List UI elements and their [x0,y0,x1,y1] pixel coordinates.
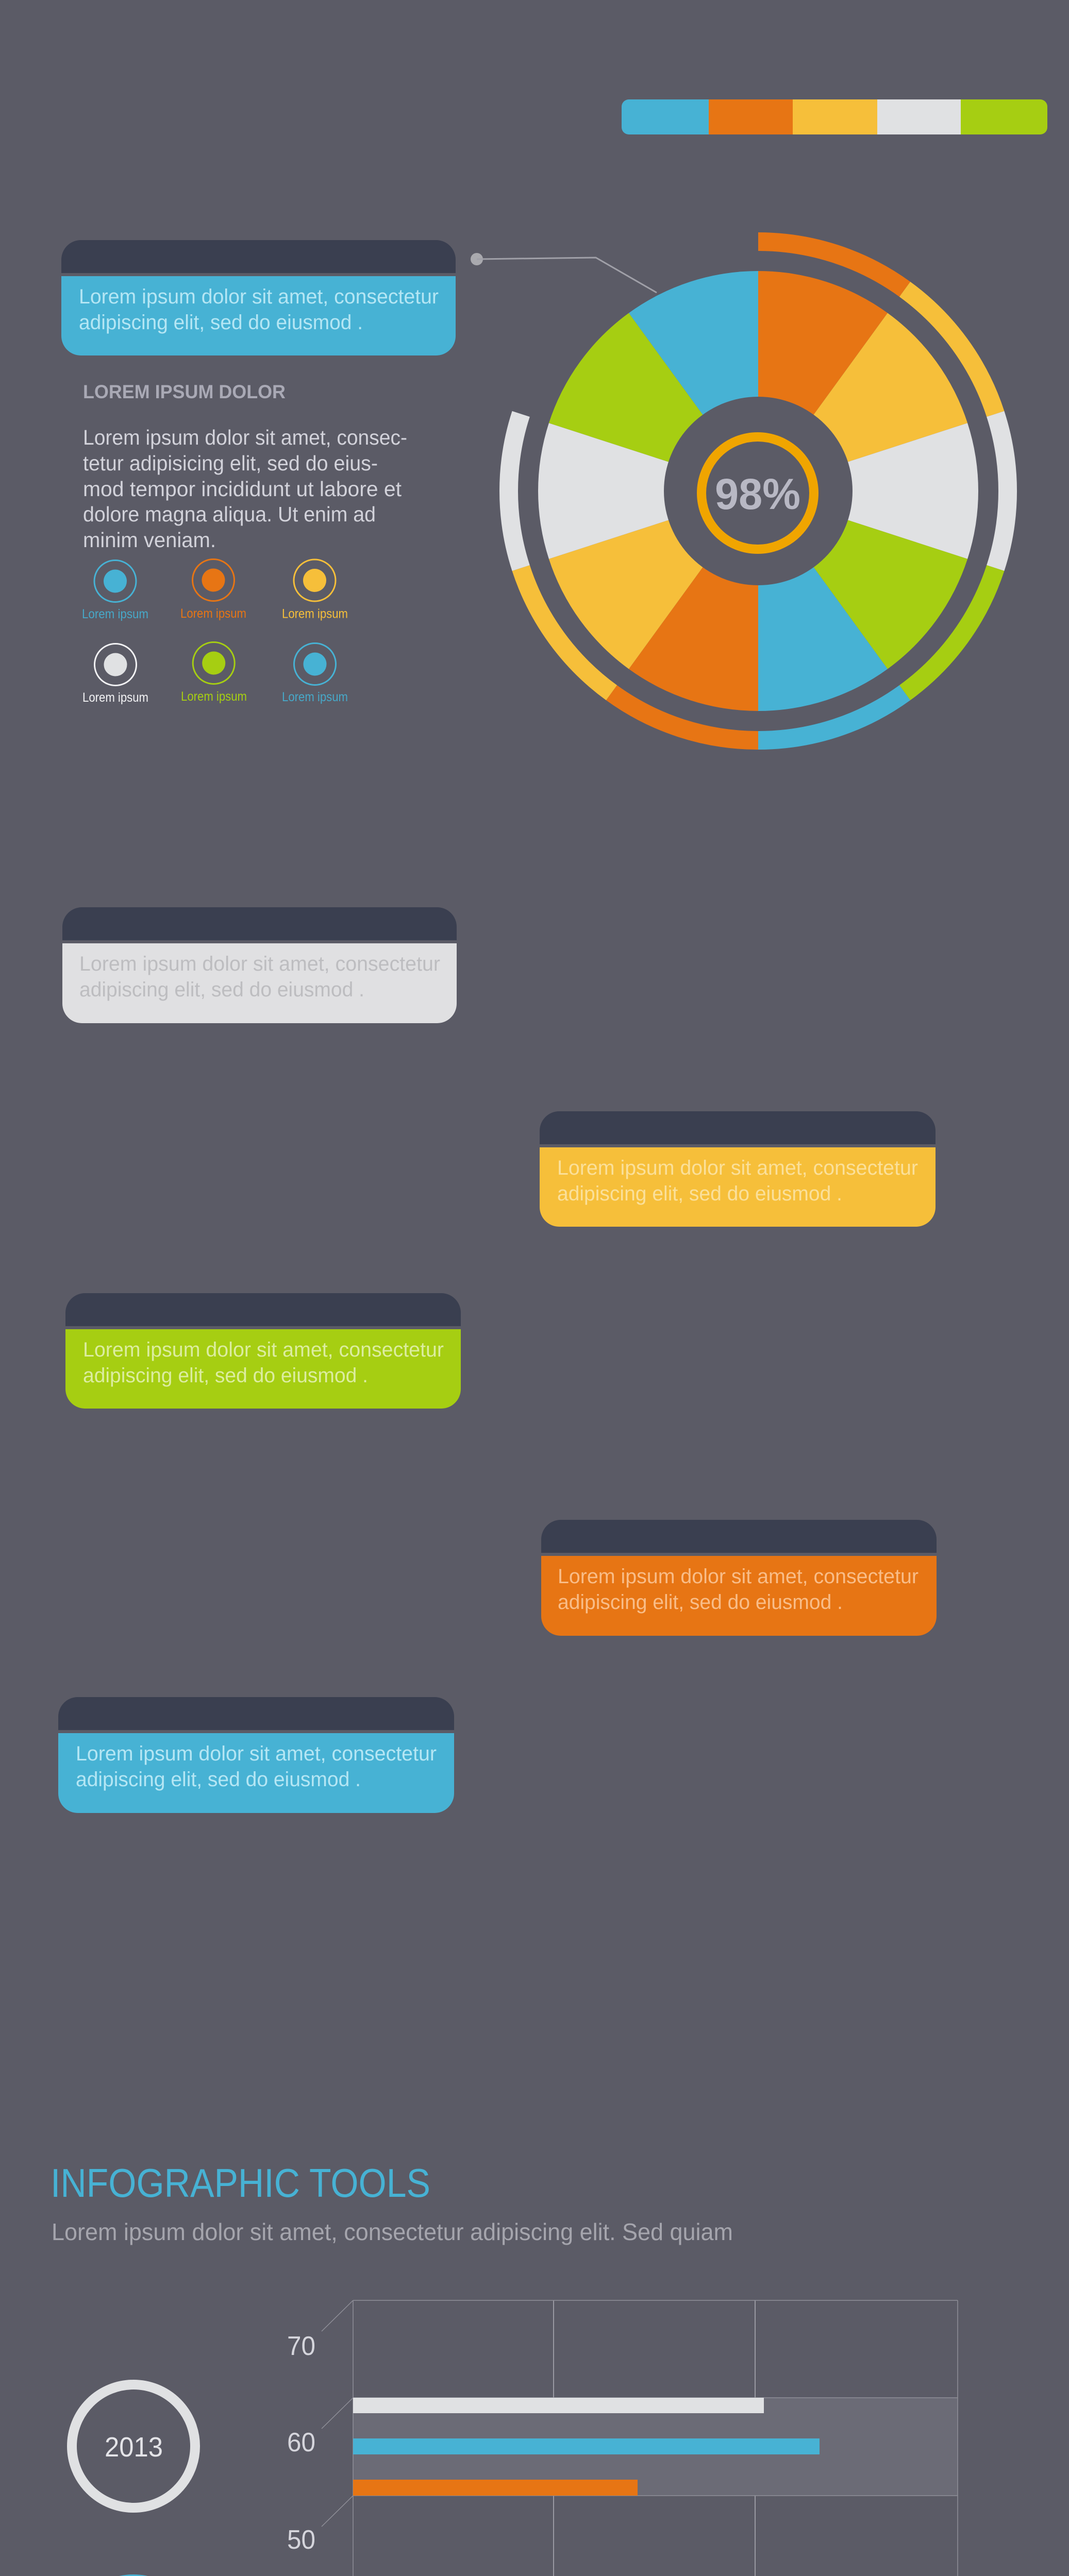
bars group one [353,2398,820,2496]
legend item: second blue [282,643,348,704]
callout card: blue bottom [58,1697,454,1813]
pie wedges [538,271,978,711]
callout card: orange: Lorem ipsum dolor sit amet, consectetur [558,1565,918,1588]
callout card: blue bottom: adipiscing elit, sed do eiusmod . [76,1768,361,1791]
callout card: blue bottom: Lorem ipsum dolor sit amet, consectetur [76,1742,437,1765]
callout card: blue top [61,240,456,355]
heading: lorem ipsum dolor: LOREM IPSUM DOLOR [83,381,286,402]
pie centre hole [664,397,853,585]
callout card: green [65,1293,461,1409]
callout card: orange [541,1520,937,1636]
legend item: orange [180,560,246,621]
subtitle: Lorem ipsum dolor sit amet, consectetur adipiscing elit. Sed quiam [52,2218,733,2245]
callout card: yellow [540,1111,936,1227]
body text block: tetur adipisicing elit, sed do eius- [83,451,378,475]
callout card: grey: adipiscing elit, sed do eiusmod . [79,978,364,1001]
body text block: mod tempor incididunt ut labore et [83,477,402,501]
bar chart [287,2300,958,2576]
outer segmented ring [509,242,1008,740]
legend item: green: Lorem ipsum [181,689,247,704]
legend item: yellow: Lorem ipsum [282,607,348,621]
legend item: blue [82,561,148,621]
callout card: green: adipiscing elit, sed do eiusmod . [83,1364,368,1387]
legend item: white: Lorem ipsum [82,690,148,705]
legend item: orange: Lorem ipsum [180,606,246,621]
body text block: minim veniam. [83,528,216,552]
chart bands [353,2398,958,2576]
centre value: 98% [715,470,800,518]
year circle: 2013 [72,2384,195,2508]
connector line from card to pie [471,253,657,293]
legend icons [82,560,348,705]
y axis labels: 50 [287,2525,315,2555]
body text block [83,426,407,552]
callout card: blue top: adipiscing elit, sed do eiusmod . [79,311,363,334]
body text block: Lorem ipsum dolor sit amet, consec- [83,426,407,449]
legend item: second blue: Lorem ipsum [282,690,348,704]
callout card: yellow: Lorem ipsum dolor sit amet, consectetur [557,1157,918,1179]
callout card: grey [62,907,457,1023]
legend item: white [82,644,148,705]
title: INFOGRAPHIC TOOLS [51,2160,430,2206]
legend item: blue: Lorem ipsum [82,607,148,621]
year circle: 2013: 2013 [105,2432,163,2463]
y axis labels: 70 [287,2331,315,2361]
y axis labels [287,2331,315,2576]
y axis labels: 60 [287,2428,315,2458]
callout card: yellow: adipiscing elit, sed do eiusmod . [557,1182,842,1205]
body text block: dolore magna aliqua. Ut enim ad [83,502,376,526]
legend item: yellow [282,560,348,621]
callout card: blue top: Lorem ipsum dolor sit amet, consectetur [79,285,439,308]
colour palette bar [622,99,1047,134]
callout card: green: Lorem ipsum dolor sit amet, consectetur [83,1338,444,1361]
legend item: green [181,642,247,704]
callout card: grey: Lorem ipsum dolor sit amet, consectetur [79,953,440,975]
centre ring [701,437,814,549]
callout card: orange: adipiscing elit, sed do eiusmod . [558,1591,843,1614]
pie chart with outer ring [509,242,1008,740]
